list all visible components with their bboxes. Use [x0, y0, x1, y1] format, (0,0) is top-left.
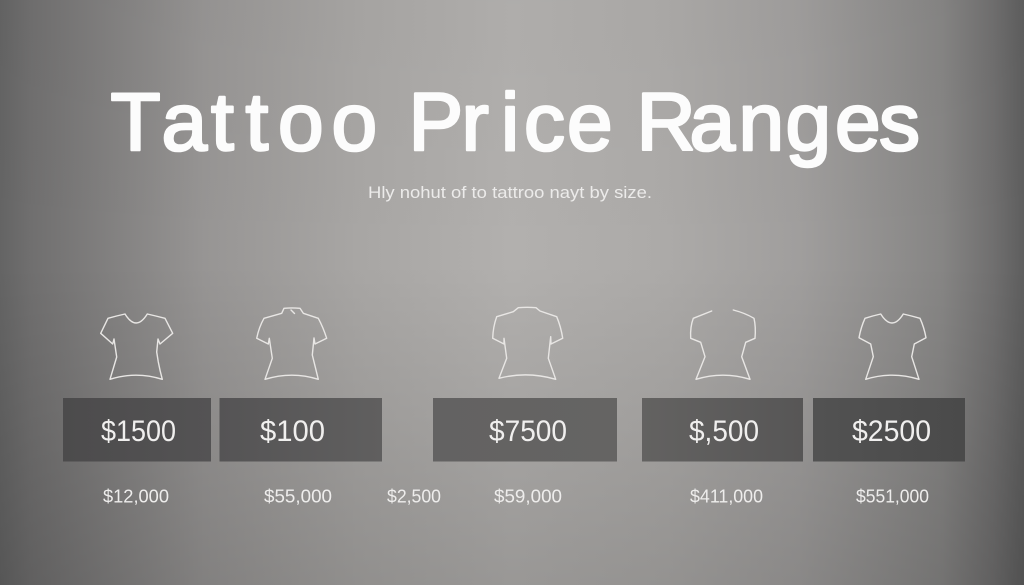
range label 2: $55,000: [264, 486, 332, 506]
price box 1: [63, 398, 211, 462]
column 5: [813, 314, 965, 506]
column 4: [642, 310, 803, 506]
price box 4: [642, 398, 803, 462]
price box 5: [813, 398, 965, 462]
range label 5: $551,000: [856, 486, 929, 506]
column 1: [63, 314, 211, 506]
price box 3: $7500: [489, 415, 567, 448]
icon: t-shirt 1: [101, 314, 173, 379]
icon: t-shirt 3: [493, 307, 563, 379]
extra range label: $2,500: [387, 486, 441, 506]
title: [110, 77, 920, 168]
price box 3: [433, 398, 617, 462]
price box 2: $100: [260, 415, 325, 448]
column 3: [433, 307, 617, 506]
icon: t-shirt 2: [257, 308, 327, 379]
title: Price: [408, 77, 613, 168]
icon: t-shirt 4: [691, 310, 755, 379]
icon: t-shirt 5: [859, 314, 926, 379]
title: Tattoo: [110, 77, 377, 168]
title: Ranges: [636, 77, 920, 168]
price box 2: [220, 398, 382, 462]
price box 5: $2500: [852, 415, 931, 448]
subtitle: Hly nohut of to tattroo nayt by size.: [368, 183, 652, 202]
price box 4: $,500: [689, 415, 759, 448]
range label 4: $411,000: [690, 486, 763, 506]
range label 3: $59,000: [494, 486, 562, 506]
price box 1: $1500: [101, 415, 176, 448]
range label 1: $12,000: [103, 486, 169, 506]
column 2: [220, 308, 382, 506]
